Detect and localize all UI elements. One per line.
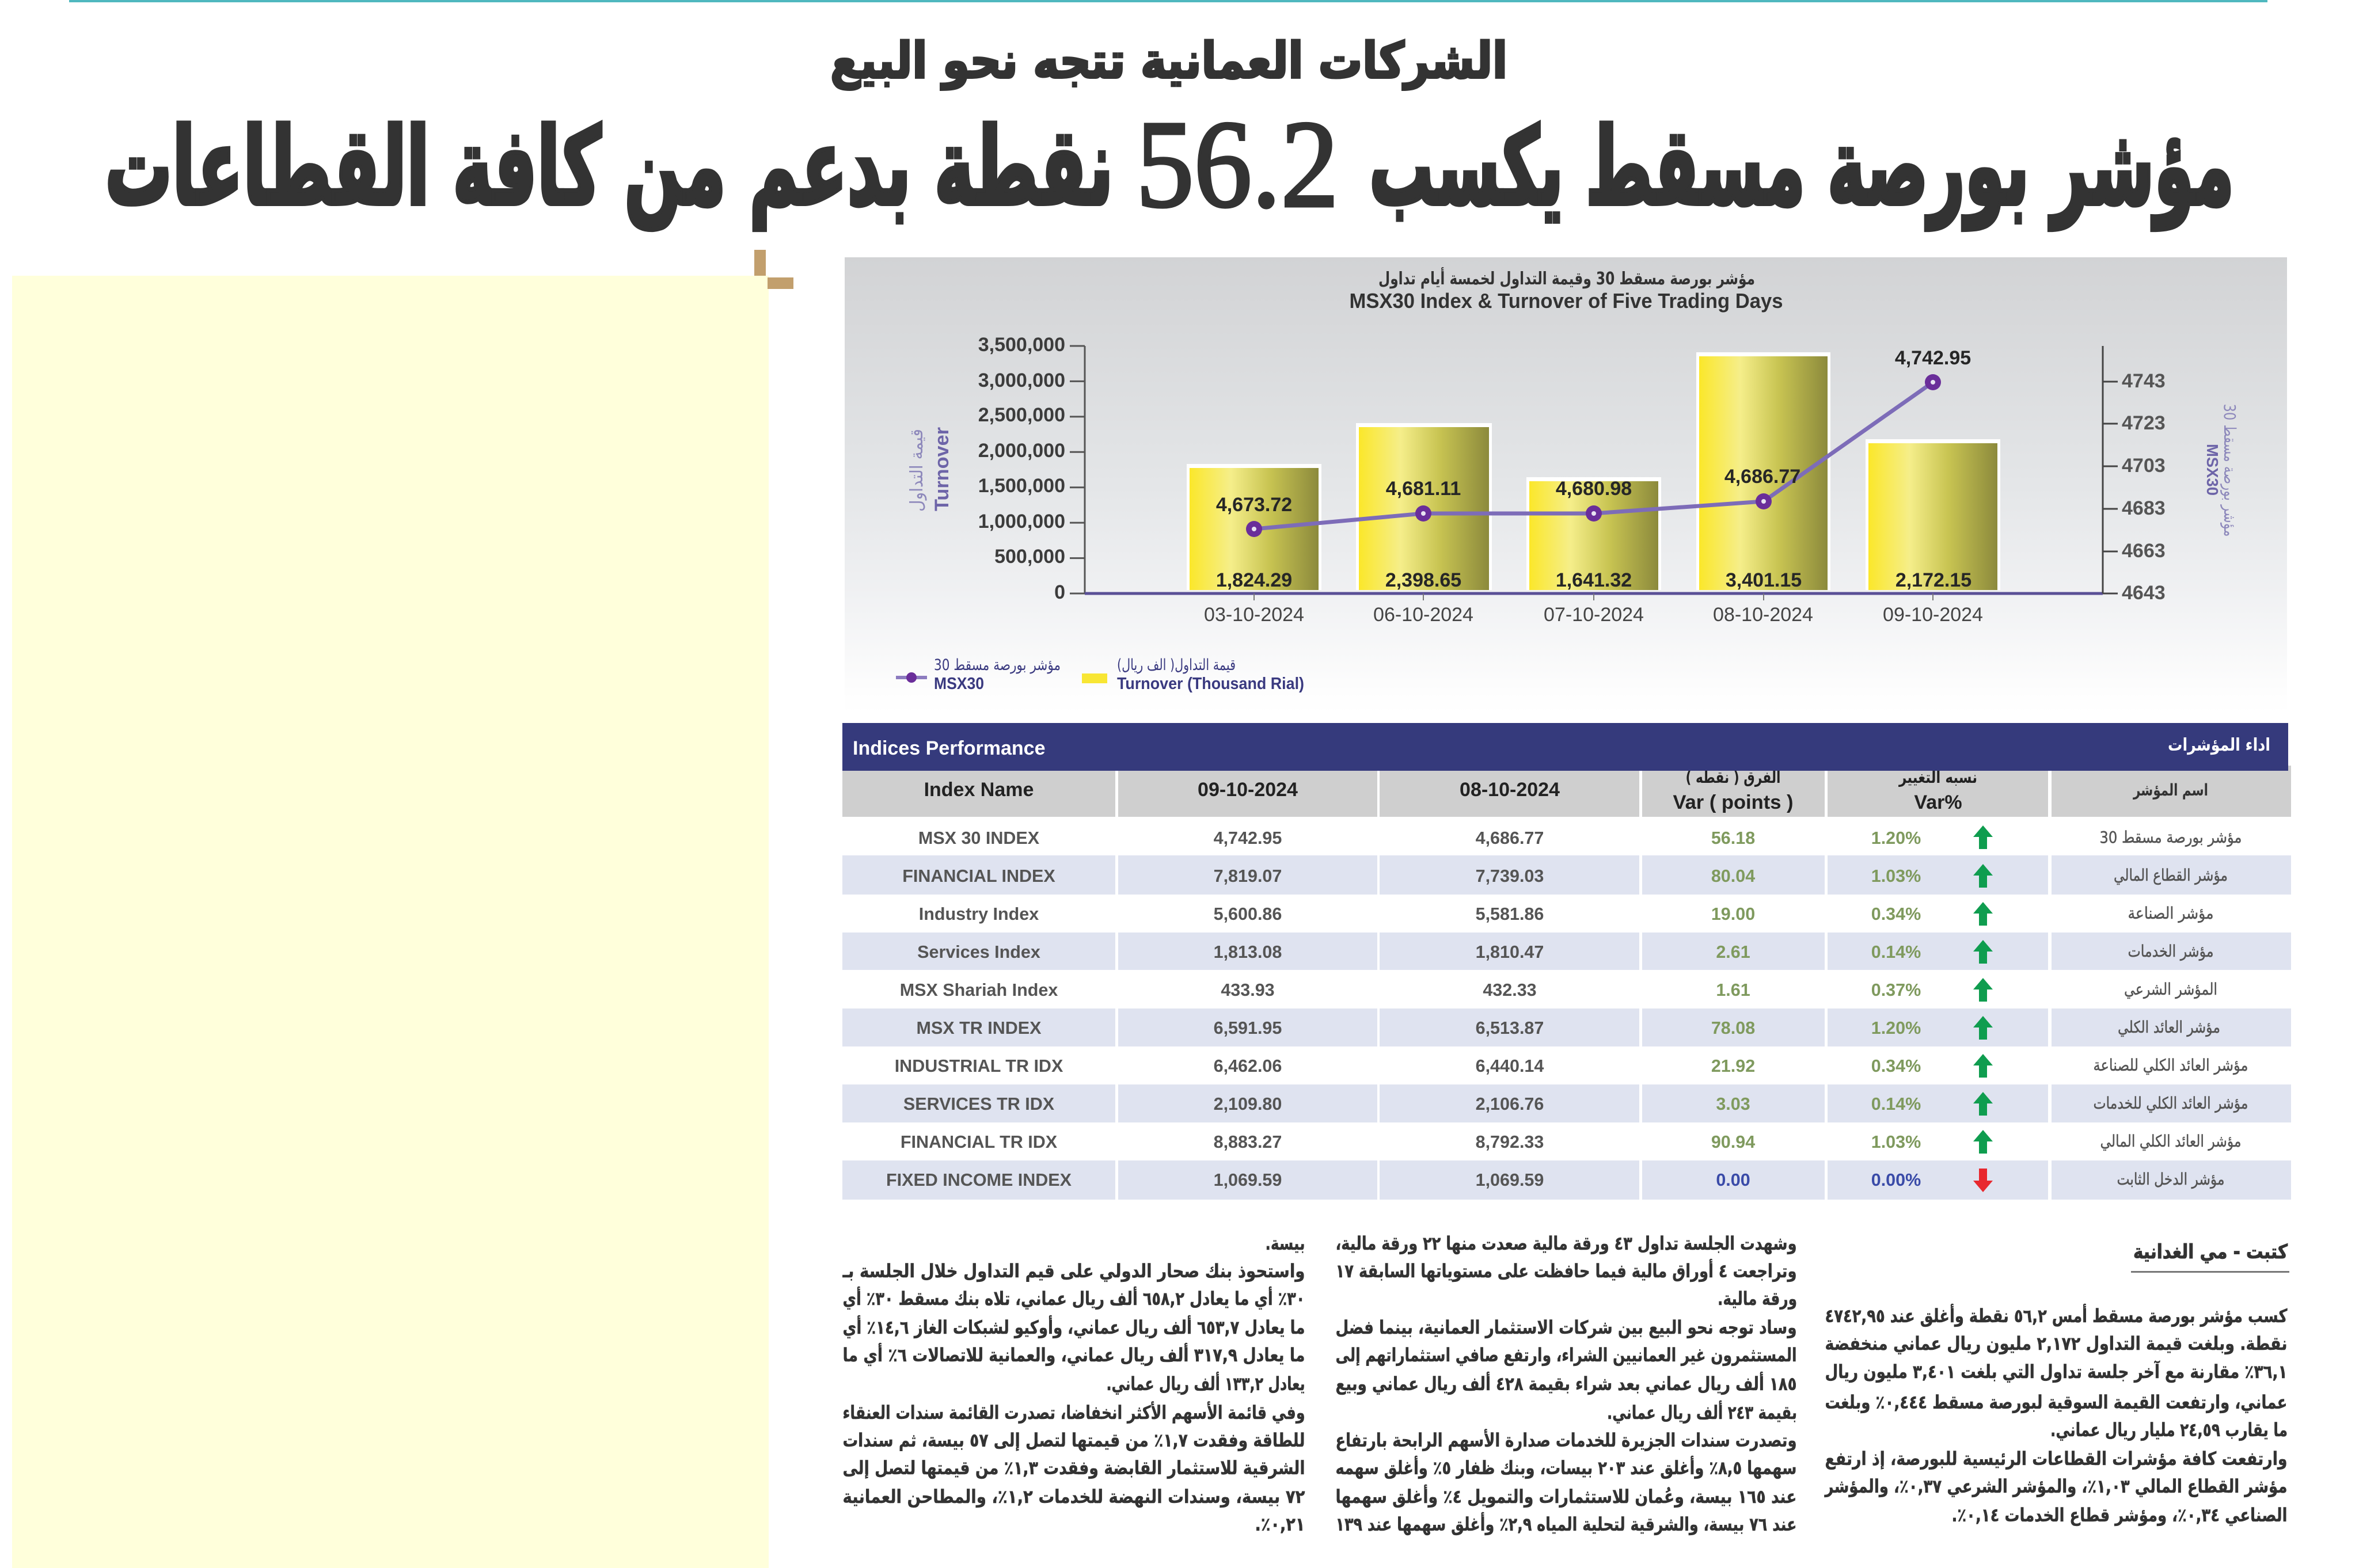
row: MSX TR INDEX: مؤشر العائد الكلي	[2118, 1018, 2220, 1037]
row: MSX Shariah Index: 433.93	[1221, 980, 1275, 1000]
row: INDUSTRIAL TR IDX	[895, 1054, 2248, 1078]
column headers: Var ( points )	[1673, 791, 1793, 813]
left axis title	[907, 427, 953, 512]
bars	[1187, 352, 2000, 590]
legend	[896, 656, 1304, 693]
date labels: 09-10-2024	[1883, 604, 1983, 626]
row: MSX 30 INDEX: 4,686.77	[1476, 828, 1544, 848]
row: FINANCIAL TR IDX: مؤشر العائد الكلي المالي	[2100, 1132, 2241, 1151]
row: Services Index: 1,813.08	[1214, 942, 1282, 962]
turnover value labels: 3,401.15	[1726, 569, 1802, 591]
subtitle: الشركات العمانية تتجه نحو البيع	[830, 32, 1507, 90]
left axis: 3,500,000	[978, 334, 1065, 356]
row: Industry Index: 0.34%	[1871, 904, 1921, 924]
column headers: 08-10-2024	[1460, 779, 1560, 801]
left axis: 0	[1054, 581, 1065, 603]
row: MSX TR INDEX: 6,513.87	[1476, 1018, 1544, 1038]
row: Services Index: 0.14%	[1871, 942, 1921, 962]
row: INDUSTRIAL TR IDX: مؤشر العائد الكلي للصناعة	[2094, 1056, 2248, 1075]
article column 1 (left): ما يعادل ٣١٧,٩ ألف ريال عماني، والعمانية للاتصالات ٦٪ أي ما	[843, 1343, 1305, 1366]
article column 1 (left): ما يعادل ٦٥٣,٧ ألف ريال عماني، وأوكيو لشبكات الغاز ١٤,٦٪ أي	[843, 1315, 1305, 1338]
row: MSX TR INDEX: 1.20%	[1871, 1018, 1921, 1038]
row: MSX 30 INDEX: 4,742.95	[1214, 828, 1282, 848]
article column 2 (middle): ١٨٥ ألف ريال عماني بعد شراء بقيمة ٤٢٨ ألف ريال عماني وبيع	[1336, 1372, 1796, 1395]
left axis: 1,500,000	[978, 475, 1065, 497]
date labels: 06-10-2024	[1373, 604, 1473, 626]
article column 1 (left)	[842, 1232, 1305, 1535]
turnover label english: Turnover	[931, 427, 953, 511]
article column 3 (right): نقطة. وبلغت قيمة التداول ٢,١٧٢ مليون ريال عماني منخفضة	[1825, 1333, 2287, 1354]
legend: turnover swatch	[1082, 656, 1304, 693]
row: MSX Shariah Index: 432.33	[1483, 980, 1537, 1000]
row: FINANCIAL INDEX	[902, 864, 2228, 888]
top rule	[69, 0, 2267, 2]
article column 2 (middle): وتراجعت ٤ أوراق مالية فيما حافظت على مستوياتها السابقة ١٧	[1336, 1259, 1796, 1282]
right axis: 4683	[2122, 497, 2166, 519]
left axis: 2,500,000	[978, 404, 1065, 426]
row: Services Index: Services Index	[917, 942, 1040, 962]
column headers	[842, 766, 2291, 817]
MSX30 label arabic: مؤشر بورصة مسقط 30	[2220, 404, 2239, 536]
blank yellow advert panel	[12, 276, 769, 1568]
chart title english: MSX30 Index & Turnover of Five Trading Days	[1350, 289, 1783, 313]
left axis: 500,000	[994, 546, 1065, 568]
row: MSX Shariah Index	[900, 978, 2217, 1002]
row: MSX 30 INDEX: 1.20%	[1871, 828, 1921, 848]
row: FINANCIAL INDEX: 7,819.07	[1214, 866, 1282, 886]
row: INDUSTRIAL TR IDX: INDUSTRIAL TR IDX	[895, 1056, 1063, 1076]
column headers: Var%	[1914, 791, 1962, 813]
row: MSX TR INDEX: MSX TR INDEX	[917, 1018, 1042, 1038]
row: MSX TR INDEX: 6,591.95	[1214, 1018, 1282, 1038]
striped row backgrounds	[842, 855, 2291, 1200]
legend: index line	[896, 656, 1061, 693]
row: Industry Index	[919, 902, 2213, 926]
row: FINANCIAL TR IDX	[901, 1130, 2241, 1154]
row: FIXED INCOME INDEX	[886, 1169, 2225, 1192]
byline: كتبت - مي الغدانية	[2133, 1240, 2288, 1263]
date labels: 03-10-2024	[1204, 604, 1304, 626]
row: Services Index: 1,810.47	[1476, 942, 1544, 962]
article column 1 (left): واستحوذ بنك صحار الدولي على قيم التداول خلال الجلسة بـ	[842, 1260, 1305, 1282]
index value labels	[1216, 347, 1971, 516]
row: FINANCIAL INDEX: 80.04	[1711, 866, 1755, 886]
article column 1 (left): ٣٠٪ أي ما يعادل ٦٥٨,٢ ألف ريال عماني، تلاه بنك مسقط ٣٠٪ أي	[843, 1287, 1305, 1310]
row: FINANCIAL TR IDX: 8,883.27	[1214, 1132, 1282, 1152]
panel: chart	[845, 257, 2287, 714]
row: MSX TR INDEX: 78.08	[1711, 1018, 1755, 1038]
article column 2 (middle)	[1336, 1232, 1797, 1535]
row: Industry Index: 19.00	[1711, 904, 1755, 924]
article column 3 (right): مؤشر القطاع المالي ١,٠٣٪، والمؤشر الشرعي ٠,٣٧٪، والمؤشر	[1824, 1475, 2287, 1497]
row: SERVICES TR IDX	[903, 1092, 2248, 1116]
index line	[1246, 374, 1941, 537]
row: MSX 30 INDEX: MSX 30 INDEX	[918, 828, 1040, 848]
row: SERVICES TR IDX: 2,109.80	[1214, 1094, 1282, 1114]
row: Industry Index: 5,600.86	[1214, 904, 1282, 924]
row: Services Index: مؤشر الخدمات	[2128, 942, 2213, 961]
row: MSX Shariah Index: 0.37%	[1871, 980, 1921, 1000]
column headers: 09-10-2024	[1198, 779, 1298, 801]
legend: turnover swatch: قيمة التداول( الف ريال)	[1117, 656, 1236, 674]
row: INDUSTRIAL TR IDX: 6,462.06	[1214, 1056, 1282, 1076]
byline	[2131, 1240, 2289, 1273]
row: FINANCIAL TR IDX: 90.94	[1711, 1132, 1755, 1152]
row: FINANCIAL TR IDX: 8,792.33	[1476, 1132, 1544, 1152]
row: SERVICES TR IDX: مؤشر العائد الكلي للخدمات	[2094, 1094, 2248, 1113]
article column 1 (left): يعادل ١٣٣,٢ ألف ريال عماني.	[1107, 1372, 1305, 1395]
row: FINANCIAL INDEX: FINANCIAL INDEX	[902, 866, 1055, 886]
article column 1 (left): ٠,٢١٪.	[1255, 1513, 1305, 1535]
index value labels: 4,742.95	[1895, 347, 1971, 369]
article column 1 (left): وفي قائمة الأسهم الأكثر انخفاضا، تصدرت القائمة سندات العنقاء	[843, 1401, 1305, 1424]
row: FINANCIAL TR IDX: FINANCIAL TR IDX	[901, 1132, 1058, 1152]
bar 03-10-2024	[1187, 464, 1321, 590]
left axis: 1,000,000	[978, 511, 1065, 532]
panel: indices table	[842, 723, 2291, 1200]
row: FIXED INCOME INDEX: FIXED INCOME INDEX	[886, 1170, 1072, 1190]
legend: index line: مؤشر بورصة مسقط 30	[934, 656, 1061, 674]
bar 09-10-2024	[1866, 439, 2000, 590]
row: SERVICES TR IDX: SERVICES TR IDX	[903, 1094, 1055, 1114]
row: MSX Shariah Index: MSX Shariah Index	[900, 980, 1058, 1000]
turnover label arabic: قيمة التداول	[907, 429, 927, 512]
date labels: 08-10-2024	[1713, 604, 1813, 626]
column headers: نسبه التغيير	[1898, 768, 1977, 787]
row: MSX 30 INDEX: 56.18	[1711, 828, 1755, 848]
article column 2 (middle): ورقة مالية.	[1718, 1288, 1797, 1310]
row: Industry Index: مؤشر الصناعة	[2128, 904, 2213, 923]
article column 2 (middle): سهمها ٨,٥٪ وأغلق عند ٢٠٣ بيسات، وبنك ظفار ٥٪ وأغلق سهمه	[1336, 1456, 1796, 1479]
left axis: 3,000,000	[978, 370, 1065, 391]
row: FINANCIAL INDEX: مؤشر القطاع المالي	[2114, 866, 2228, 885]
row: FIXED INCOME INDEX: 1,069.59	[1476, 1170, 1544, 1190]
row: FINANCIAL INDEX: 7,739.03	[1476, 866, 1544, 886]
article column 2 (middle): عند ١٦٥ بيسة، وعُمان للاستثمارات والتمويل ٤٪ وأغلق سهمها	[1336, 1485, 1796, 1508]
row: MSX TR INDEX	[917, 1016, 2220, 1040]
article column 3 (right): ما يقارب ٢٤,٥٩ مليار ريال عماني.	[2050, 1419, 2288, 1441]
index value labels: 4,673.72	[1216, 494, 1292, 516]
turnover value labels: 2,398.65	[1385, 569, 1461, 591]
article column 1 (left): للطاقة وفقدت ١,٧٪ من قيمتها لتصل إلى ٥٧ بيسة، ثم سندات	[843, 1429, 1305, 1452]
right axis: 4643	[2122, 582, 2166, 604]
table title bar: Indices Performance	[853, 737, 1045, 759]
article column 3 (right)	[1824, 1304, 2288, 1526]
row: INDUSTRIAL TR IDX: 0.34%	[1871, 1056, 1921, 1076]
headline: left part: نقطة بدعم من كافة القطاعات	[105, 105, 1114, 230]
bar 06-10-2024	[1356, 423, 1492, 590]
article column 2 (middle): وشهدت الجلسة تداول ٤٣ ورقة مالية صعدت منها ٢٢ ورقة مالية،	[1336, 1232, 1796, 1254]
article column 3 (right): كسب مؤشر بورصة مسقط أمس ٥٦,٢ نقطة وأغلق عند ٤٧٤٢,٩٥	[1825, 1304, 2288, 1327]
date labels	[1204, 604, 1983, 626]
article column 3 (right): عماني، وارتفعت القيمة السوقية لبورصة مسقط ٠,٤٤٤٪ وبلغت	[1825, 1391, 2287, 1413]
bar 07-10-2024	[1526, 477, 1661, 590]
row: SERVICES TR IDX: 2,106.76	[1476, 1094, 1544, 1114]
turnover value labels: 1,641.32	[1556, 569, 1632, 591]
index value labels: 4,680.98	[1556, 478, 1632, 500]
column headers: اسم المؤشر	[2132, 781, 2208, 800]
article column 1 (left): ٧٢ بيسة، وسندات النهضة للخدمات ١,٢٪، والمطاحن العمانية	[843, 1486, 1305, 1508]
right axis: 4703	[2122, 455, 2166, 477]
right axis: 4723	[2122, 412, 2166, 434]
row: MSX Shariah Index: المؤشر الشرعي	[2124, 980, 2217, 999]
bar 08-10-2024	[1696, 352, 1830, 590]
row: MSX 30 INDEX	[918, 825, 2242, 849]
row: SERVICES TR IDX: 3.03	[1716, 1094, 1750, 1114]
row: MSX Shariah Index: 1.61	[1716, 980, 1750, 1000]
row: FINANCIAL INDEX: 1.03%	[1871, 866, 1921, 886]
article column 2 (middle): وساد توجه نحو البيع بين شركات الاستثمار العمانية، بينما فضل	[1336, 1316, 1796, 1338]
tan corner mark	[754, 250, 793, 289]
left axis	[978, 334, 1085, 603]
chart background	[845, 257, 2287, 714]
article column 1 (left): بيسة.	[1266, 1232, 1305, 1254]
row: FIXED INCOME INDEX: 1,069.59	[1214, 1170, 1282, 1190]
headline: figure: 56.2	[1136, 95, 1339, 233]
article column 2 (middle): عند ٧٦ بيسة، والشرقية لتحلية المياه ٢,٩٪ وأغلق سهمها عند ١٣٩	[1336, 1512, 1796, 1535]
turnover value labels: 1,824.29	[1216, 569, 1292, 591]
right axis title	[2204, 404, 2239, 536]
index value labels: 4,681.11	[1386, 478, 1461, 500]
date labels: 07-10-2024	[1544, 604, 1644, 626]
row: INDUSTRIAL TR IDX: 21.92	[1711, 1056, 1755, 1076]
row: Industry Index: 5,581.86	[1476, 904, 1544, 924]
left axis: 2,000,000	[978, 440, 1065, 462]
article column 3 (right): ٣٦,١٪ مقارنة مع آخر جلسة تداول التي بلغت ٣,٤٠١ مليون ريال	[1825, 1360, 2287, 1383]
article column 2 (middle): المستثمرون غير العمانيين الشراء، وارتفع صافي استثماراتهم إلى	[1336, 1344, 1796, 1367]
row: FIXED INCOME INDEX: 0.00	[1716, 1170, 1750, 1190]
right axis: 4663	[2122, 540, 2166, 562]
column headers: الفرق ( نقطه )	[1686, 768, 1780, 787]
row: MSX 30 INDEX: مؤشر بورصة مسقط 30	[2099, 828, 2242, 847]
row: FIXED INCOME INDEX: مؤشر الدخل الثابت	[2117, 1170, 2225, 1189]
article column 2 (middle): وتصدرت سندات الجزيرة للخدمات صدارة الأسهم الرابحة بارتفاع	[1336, 1429, 1796, 1451]
row: FINANCIAL TR IDX: 1.03%	[1871, 1132, 1921, 1152]
row: SERVICES TR IDX: 0.14%	[1871, 1094, 1921, 1114]
legend: index line: MSX30	[934, 675, 984, 693]
row: INDUSTRIAL TR IDX: 6,440.14	[1476, 1056, 1544, 1076]
legend: turnover swatch: Turnover (Thousand Rial)	[1117, 675, 1304, 693]
row: Services Index	[917, 940, 2213, 964]
article column 1 (left): الشرقية للاستثمار القابضة وفقدت ١,٣٪ من قيمتها لتصل إلى	[843, 1457, 1305, 1479]
right axis: 4743	[2122, 370, 2166, 392]
main headline	[105, 95, 2234, 233]
index value labels: 4,686.77	[1724, 466, 1800, 488]
row: Industry Index: Industry Index	[919, 904, 1039, 924]
chart title	[1350, 267, 1783, 313]
article column 3 (right): الصناعي ٠,٣٤٪، ومؤشر قطاع الخدمات ٠,١٤٪.	[1952, 1504, 2287, 1526]
turnover value labels: 2,172.15	[1895, 569, 1971, 591]
article column 2 (middle): بقيمة ٢٤٣ ألف ريال عماني.	[1607, 1400, 1797, 1424]
row: Services Index: 2.61	[1716, 942, 1750, 962]
column headers: Index Name	[924, 779, 1034, 801]
MSX30 label english: MSX30	[2204, 444, 2221, 496]
baseline and x ticks	[1085, 592, 2103, 595]
table title bar	[842, 723, 2288, 771]
row: FIXED INCOME INDEX: 0.00%	[1871, 1170, 1921, 1190]
table title bar: اداء المؤشرات	[2168, 735, 2270, 755]
chart title arabic: مؤشر بورصة مسقط 30 وقيمة التداول لخمسة أيام تداول	[1378, 267, 1755, 289]
turnover value labels	[1216, 569, 1971, 591]
right axis	[2103, 346, 2166, 604]
